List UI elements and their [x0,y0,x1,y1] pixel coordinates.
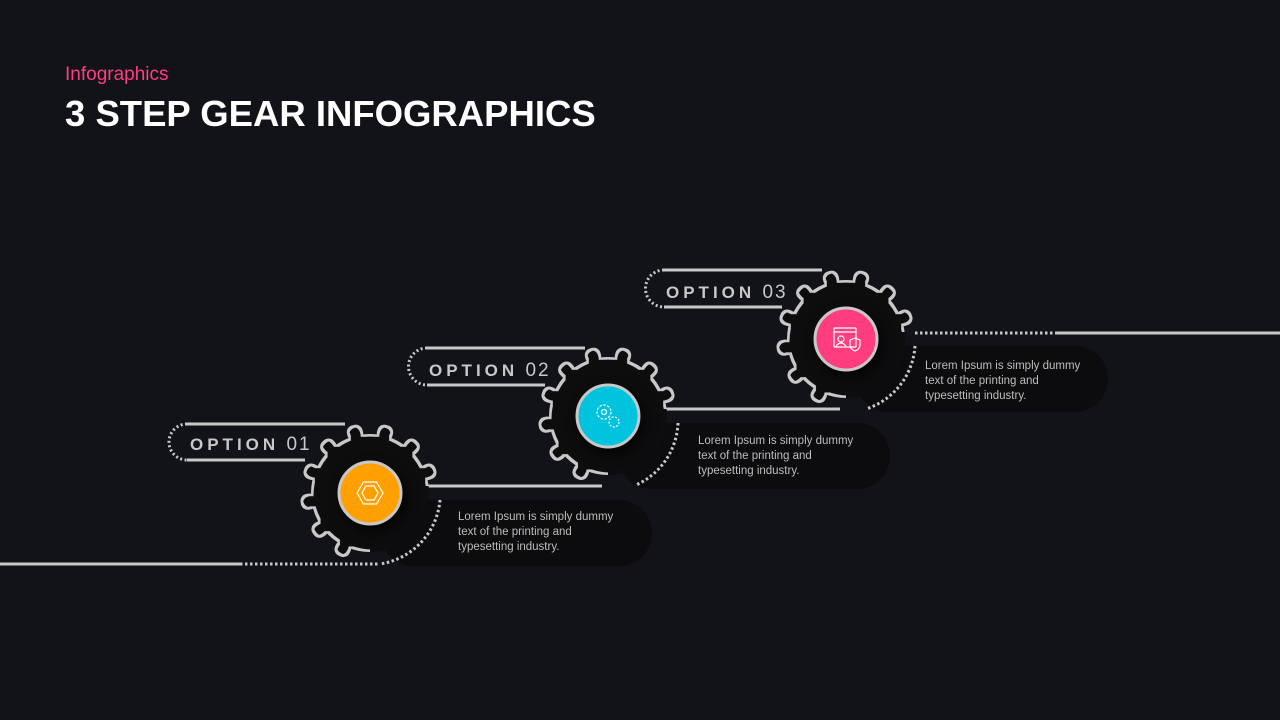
subtitle: Infographics [65,64,169,85]
descriptions: text of the printing and [698,450,812,462]
title: 3 STEP GEAR INFOGRAPHICS [65,93,596,134]
descriptions [458,360,1081,553]
dotted lines [240,333,1057,564]
descriptions: Lorem Ipsum is simply dummy [925,360,1081,372]
descriptions: text of the printing and [458,526,572,538]
descriptions: text of the printing and [925,375,1039,387]
gear 1 [300,423,439,559]
option texts: OPTION 02 [429,360,551,381]
descriptions: Lorem Ipsum is simply dummy [698,435,854,447]
descriptions: Lorem Ipsum is simply dummy [458,511,614,523]
connector lines [0,333,1280,564]
option texts [190,282,788,455]
gear 2 [538,346,677,482]
descriptions: typesetting industry. [458,541,559,553]
text panels [380,346,1108,566]
descriptions: typesetting industry. [925,390,1026,402]
option texts: OPTION 03 [666,282,788,303]
option labels [169,270,822,460]
descriptions: typesetting industry. [698,465,799,477]
diagram [0,268,1280,566]
gear 3 [776,269,915,405]
option texts: OPTION 01 [190,434,312,455]
